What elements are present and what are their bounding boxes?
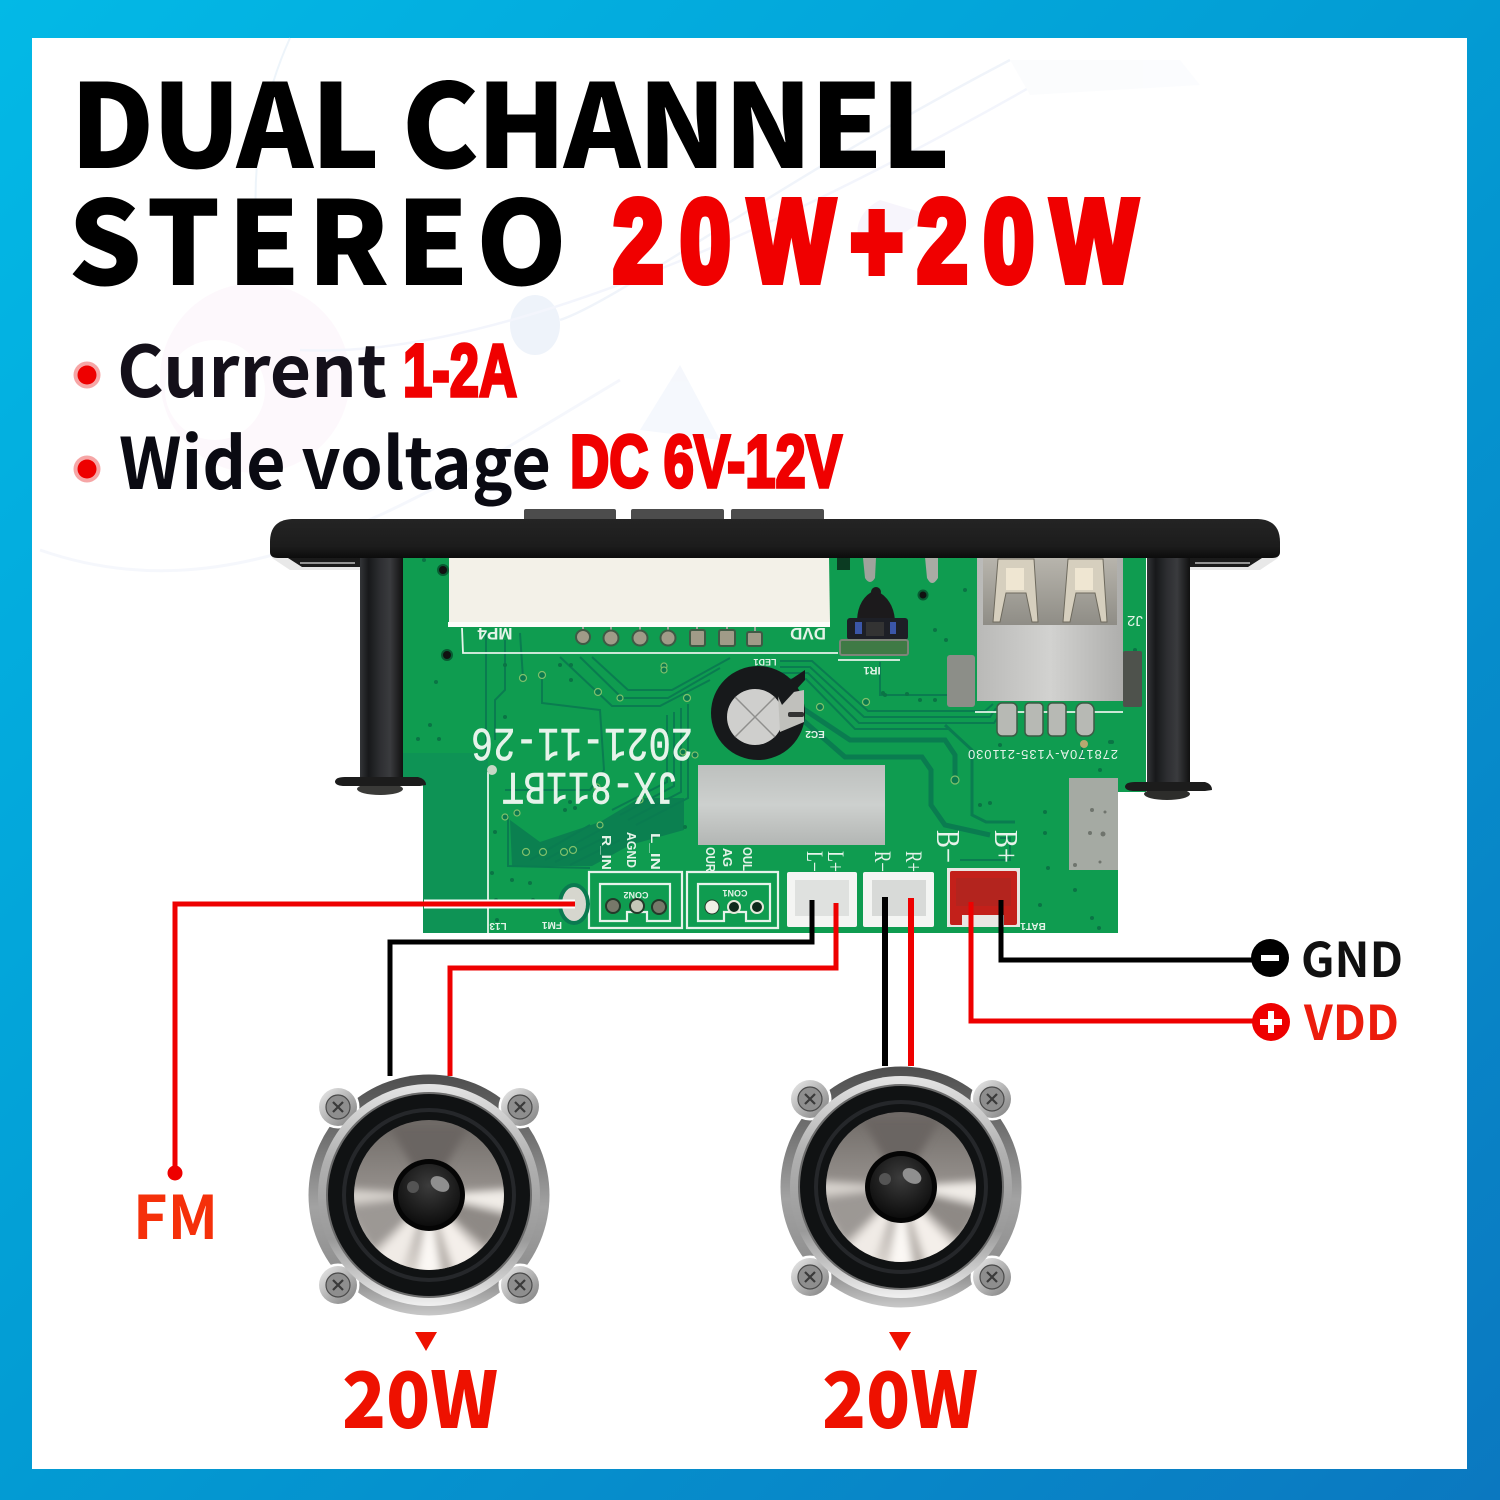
pcb dots	[416, 558, 1137, 930]
wire: right speaker positive	[908, 898, 914, 1066]
led pad	[837, 557, 850, 570]
small pin labels: AG	[720, 848, 735, 867]
white via	[487, 765, 497, 775]
circuit board module: DVD	[790, 624, 826, 643]
right power label: 20W	[822, 1339, 978, 1451]
battery pin labels	[929, 830, 1024, 863]
battery pin labels: B+	[987, 830, 1024, 863]
black face plate	[270, 519, 1280, 570]
board labels: BAT1	[1020, 920, 1046, 931]
vias	[502, 663, 959, 856]
left mounting post	[335, 556, 426, 795]
infrared receiver	[840, 587, 908, 655]
right arrow	[889, 1332, 911, 1351]
left power label: 20W	[342, 1339, 498, 1451]
battery connector	[947, 868, 1020, 927]
solder joint	[925, 557, 938, 583]
header labels: CON2	[623, 890, 649, 900]
wire: power negative	[1001, 900, 1262, 960]
board label J2: J2	[1127, 612, 1143, 629]
wire: right speaker negative	[882, 897, 888, 1066]
header pads	[606, 899, 763, 914]
speaker pin labels: L−	[802, 851, 827, 872]
wire: left speaker positive	[450, 903, 836, 1076]
right speaker	[780, 1066, 1022, 1308]
display solder pins	[576, 627, 762, 646]
lower left shade	[403, 753, 488, 933]
header labels	[623, 888, 748, 900]
right speaker connector	[863, 872, 934, 927]
small pin labels: R_IN	[599, 835, 614, 870]
icon: plus	[1252, 1003, 1290, 1041]
speaker pin labels	[802, 851, 926, 872]
silk labels: MP4	[477, 624, 512, 643]
title power rating: 20W+20W	[613, 177, 1138, 307]
small pin labels	[599, 832, 755, 873]
title line 2: STEREO	[68, 151, 567, 319]
shield patch	[1069, 778, 1118, 870]
board labels	[489, 919, 1046, 931]
board labels: L13	[489, 920, 507, 931]
voltage value: DC 6V-12V	[570, 420, 842, 503]
capacitor	[711, 666, 805, 760]
speaker pin labels: R−	[870, 851, 895, 872]
small pin labels: OUR	[703, 847, 718, 873]
top buttons	[524, 509, 824, 523]
battery pin labels: B−	[929, 830, 966, 863]
left speaker	[308, 1074, 550, 1316]
date marking: 2021-11-26	[471, 714, 693, 767]
led label: LED1	[753, 657, 777, 667]
header outlines	[589, 872, 778, 928]
fm solder pad	[558, 883, 590, 925]
wire: power positive	[971, 902, 1262, 1021]
model marking: JX-811BT	[502, 759, 678, 811]
wire: fm antenna	[168, 904, 575, 1180]
speaker pin labels: L+	[823, 851, 848, 872]
icon: minus	[1251, 939, 1289, 977]
green pcb	[403, 555, 1146, 933]
left arrow	[415, 1332, 437, 1351]
small pin labels: AGND	[624, 832, 639, 868]
bullet: current	[74, 362, 100, 388]
current value: 1-2A	[403, 329, 517, 412]
title line 1: DUAL CHANNEL	[70, 34, 950, 202]
dark copper areas	[510, 798, 684, 866]
right mounting post	[1125, 556, 1212, 800]
wire: left speaker negative	[390, 900, 812, 1076]
faint music decoration	[40, 38, 1200, 571]
pcb traces	[486, 630, 1082, 868]
small solder joints	[863, 558, 876, 582]
board code text: 278170A-Y135-211030	[968, 747, 1118, 762]
bullet: voltage	[74, 456, 100, 482]
ir label: IR1	[863, 664, 881, 676]
voltage label: Wide voltage	[119, 408, 551, 510]
board labels: FM1	[542, 919, 562, 930]
circuit board module	[270, 509, 1280, 933]
capacitor label: EC2	[805, 728, 825, 739]
vdd label: VDD	[1303, 984, 1399, 1054]
header labels: CON1	[722, 888, 748, 898]
gnd label: GND	[1301, 921, 1403, 991]
speaker pin labels: R+	[901, 851, 926, 872]
amplifier chip cover	[698, 765, 885, 845]
small pin labels: OUL	[740, 847, 755, 871]
usb port	[947, 556, 1142, 748]
small pin labels: L_IN	[648, 833, 663, 870]
mounting holes	[438, 565, 928, 660]
fm label: FM	[133, 1170, 218, 1257]
display module	[449, 557, 830, 622]
current label: Current	[117, 316, 387, 418]
silk outlines	[462, 628, 1123, 933]
left speaker connector	[787, 872, 857, 927]
